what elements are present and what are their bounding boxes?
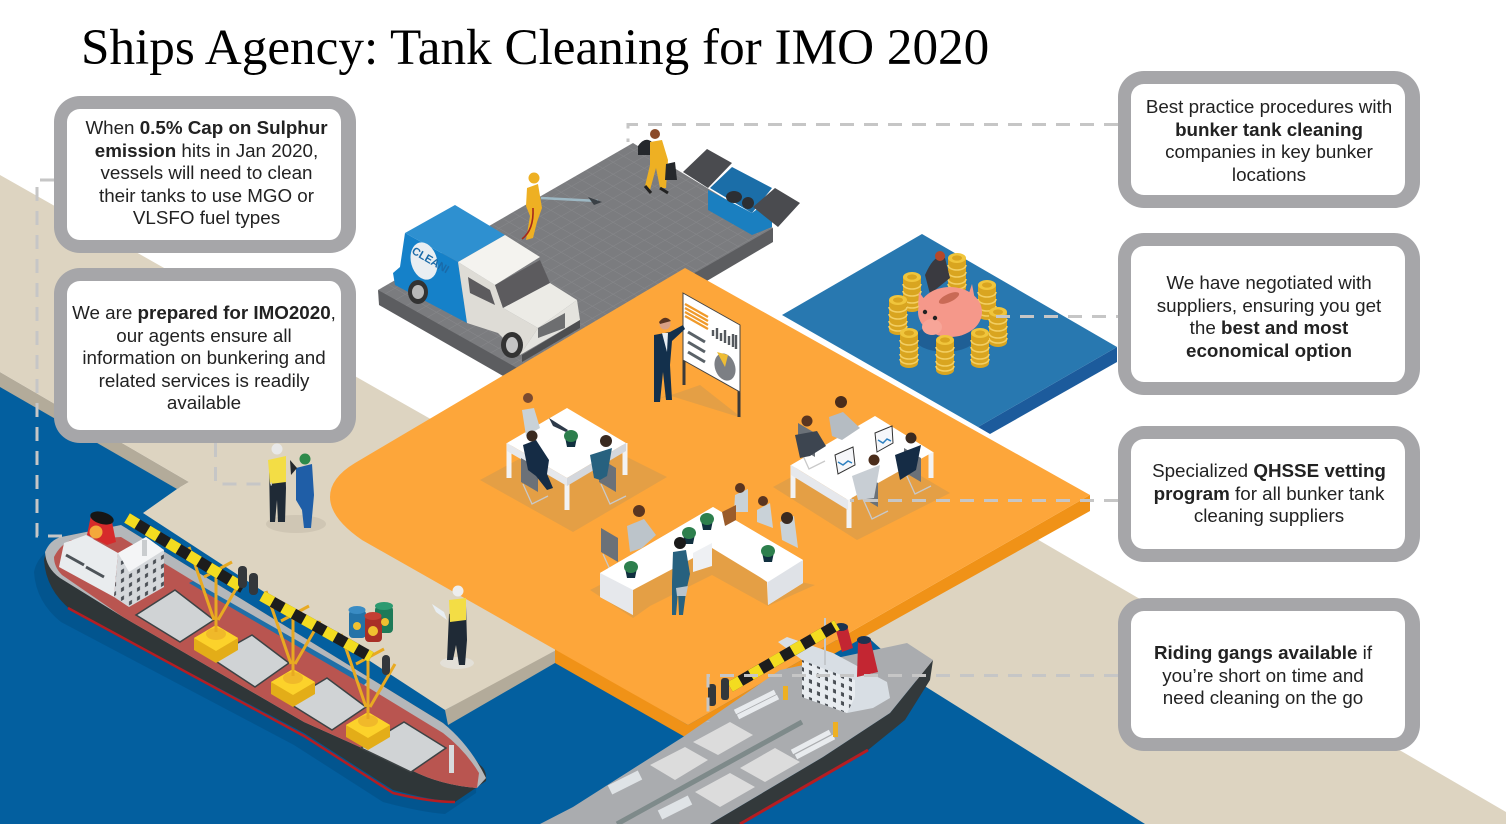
presentation board with presenter [650,293,742,418]
callout: riding gangs [1118,598,1420,751]
oil barrels [348,602,393,642]
water [0,385,1150,824]
callout text: sulphur cap: VLSFO fuel types [133,207,280,228]
callout text: best practice procedures: bunker tank cleaning [1175,119,1363,140]
dumpster with open lids [683,149,800,235]
callout text: prepared for IMO2020 [72,302,336,413]
worker carrying rubbish bags [638,129,677,193]
right quay [860,535,1506,824]
callout text: best practice procedures: locations [1232,164,1306,185]
callout text: riding gangs: you’re short on time and [1162,665,1364,686]
grey cleaning platform [378,143,773,380]
tanker ship [540,618,933,824]
callout text: negotiated suppliers: the best and most [1190,317,1348,338]
callout text: negotiated suppliers: We have negotiated with [1166,272,1372,293]
delivery van [393,205,580,362]
callout text: sulphur cap: When 0.5% Cap on Sulphur [85,117,328,138]
callout text: prepared for IMO2020: We are prepared for IMO2020, [72,302,336,323]
dashed connector lines [37,124,1130,722]
callout: best practice procedures [1118,71,1420,208]
van logo text: CLEANI [410,245,451,276]
callout text: negotiated suppliers: suppliers, ensuring you get [1157,295,1381,316]
cargo hatches [136,590,446,772]
blue finance platform [782,234,1117,434]
cranes [189,547,243,663]
callout text: prepared for IMO2020: our agents ensure all [116,325,292,346]
callout text: best practice procedures: companies in key bunker [1165,141,1373,162]
left quay [0,175,560,725]
callout text: best practice procedures [1146,96,1392,185]
callout text: sulphur cap [85,117,328,228]
meeting table left [480,393,667,532]
meeting table right [773,396,950,540]
callout: sulphur cap [54,96,356,253]
quay fender line left [127,518,390,675]
superstructure [59,509,164,607]
piggy bank with coin stacks [889,251,1007,375]
callout text: prepared for IMO2020: information on bunkering and [82,347,326,368]
callout: prepared for IMO2020 [54,268,356,443]
callout text: riding gangs: Riding gangs available if [1154,642,1372,663]
callout text: QHSSE vetting [1152,460,1386,526]
worker with pressure washer [522,172,602,240]
tiny deck workers [783,686,838,737]
callout: QHSSE vetting [1118,426,1420,562]
bulk carrier ship [34,509,486,814]
callout text: negotiated suppliers: economical option [1186,340,1352,361]
callout text: sulphur cap: emission hits in Jan 2020, [95,140,318,161]
callout text: best practice procedures: Best practice procedures with [1146,96,1392,117]
callout text: QHSSE vetting: cleaning suppliers [1194,505,1344,526]
dock workers talking [266,444,326,533]
callout text: riding gangs: need cleaning on the go [1163,687,1363,708]
callout text: riding gangs [1154,642,1372,708]
callout text: prepared for IMO2020: available [167,392,241,413]
callout text: sulphur cap: vessels will need to clean [101,162,312,183]
callout text: QHSSE vetting: Specialized QHSSE vetting [1152,460,1386,481]
callout text: QHSSE vetting: program for all bunker tank [1154,483,1384,504]
tanker superstructure [778,618,890,713]
callout text: prepared for IMO2020: related services is readily [99,370,309,391]
callout text: sulphur cap: their tanks to use MGO or [99,185,314,206]
orange office platform [330,268,1090,737]
quay fender line bottom [708,625,837,706]
callout: negotiated suppliers [1118,233,1420,395]
L-shaped reception desk with staff [590,483,815,618]
callout text: negotiated suppliers [1157,272,1382,361]
title: Ships Agency: Tank Cleaning for IMO 2020 [81,19,989,76]
inspector with clipboard [432,586,474,669]
